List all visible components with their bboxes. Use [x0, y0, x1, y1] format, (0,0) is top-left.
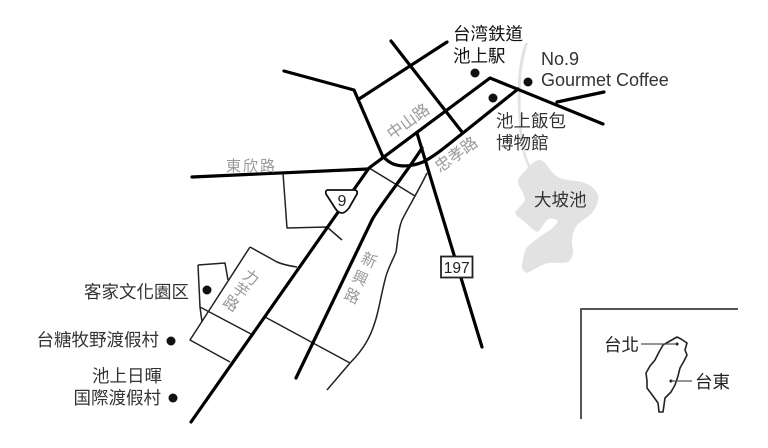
road label: 力芋路 — [219, 266, 262, 316]
inset frame — [581, 309, 738, 419]
Taiwan outline — [646, 337, 687, 412]
marker: No.9 Gourmet Coffee — [524, 49, 669, 90]
marker: 台湾鉄道池上駅: 台湾鉄道 — [453, 24, 523, 44]
marker: 台糖牧野渡假村: 台糖牧野渡假村 — [36, 330, 159, 350]
road label: 新興路 — [341, 249, 380, 308]
road label: 力芋路: 芋 — [229, 279, 252, 303]
road label: 新興路: 興 — [349, 267, 371, 290]
marker: 台湾鉄道池上駅 — [453, 24, 523, 78]
marker: 池上飯包博物館 — [488, 94, 566, 153]
road label: 中山路: 中山路 — [384, 100, 433, 143]
road label: 力芋路: 力 — [239, 266, 262, 290]
highway 9 shield: 9 — [338, 193, 347, 210]
thick roads — [191, 41, 604, 422]
highway 9 shield — [326, 190, 357, 213]
marker: 台湾鉄道池上駅: 池上駅 — [453, 46, 506, 66]
marker: 池上日暉国際渡假村 — [74, 366, 178, 408]
Taipei marker: 台北 — [604, 335, 639, 355]
marker: No.9 Gourmet Coffee: Gourmet Coffee — [541, 70, 669, 90]
label: lake name: 大坡池 — [534, 190, 586, 210]
marker: No.9 Gourmet Coffee: No.9 — [541, 49, 579, 69]
marker: 池上飯包博物館: 博物館 — [496, 133, 548, 153]
highway 197 sign: 197 — [444, 260, 470, 277]
road label: 力芋路: 路 — [219, 292, 243, 316]
road label: 新興路: 新 — [358, 249, 380, 272]
marker: 客家文化園区: 客家文化園区 — [84, 282, 189, 302]
marker: 池上飯包博物館: 池上飯包 — [496, 111, 566, 131]
marker: 池上日暉国際渡假村: 池上日暉 — [92, 366, 162, 386]
thin roads — [190, 168, 427, 390]
road label: 東欣路: 東欣路 — [226, 158, 277, 175]
marker: 池上日暉国際渡假村: 国際渡假村 — [74, 388, 161, 408]
Taitung marker — [670, 372, 730, 392]
road label: 新興路: 路 — [341, 285, 363, 308]
highway 197 sign — [441, 256, 472, 278]
inset map: Taiwan locator — [581, 309, 738, 419]
Taipei marker — [604, 335, 678, 355]
road label: 忠孝路: 忠孝路 — [432, 133, 481, 176]
Taitung marker: 台東 — [695, 372, 730, 392]
lake: 大坡池 — [515, 43, 598, 273]
